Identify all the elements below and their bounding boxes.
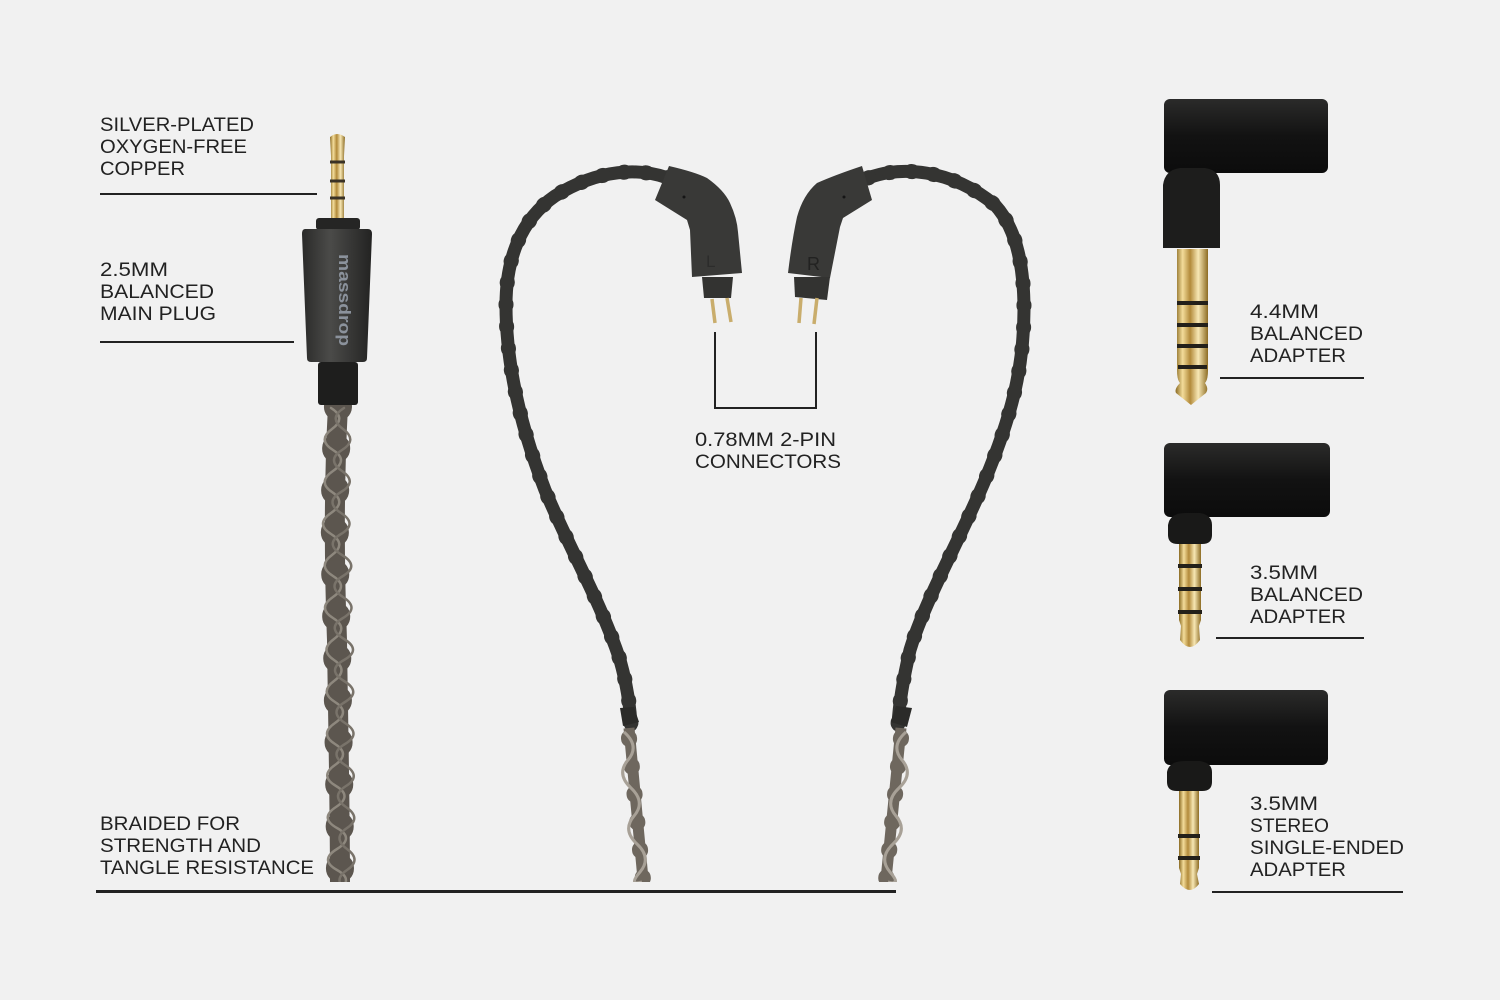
label: 2-pin connectors: CONNECTORS: [695, 452, 841, 473]
label: 3.5mm stereo adapter: ADAPTER: [1250, 860, 1346, 881]
main cable braid: [323, 406, 354, 891]
label: 2-pin connectors: [695, 430, 841, 473]
label: silver-plated copper: OXYGEN-FREE: [100, 137, 247, 158]
label: braided: TANGLE RESISTANCE: [100, 858, 314, 879]
label: silver-plated copper: SILVER-PLATED: [100, 115, 254, 136]
label: 3.5mm stereo adapter: 3.5MM: [1250, 794, 1318, 815]
label: braided: STRENGTH AND: [100, 836, 261, 857]
label: 3.5mm stereo adapter: STEREO: [1250, 816, 1329, 837]
left connector letter: L: [706, 252, 715, 271]
label: 3.5mm balanced adapter: [1250, 563, 1363, 628]
main 2.5mm plug: [302, 134, 372, 405]
label: main plug: MAIN PLUG: [100, 304, 216, 325]
label: braided: BRAIDED FOR: [100, 814, 240, 835]
label: 3.5mm stereo adapter: [1250, 794, 1404, 881]
label: 3.5mm balanced adapter: 3.5MM: [1250, 563, 1318, 584]
3.5mm balanced adapter: [1164, 443, 1330, 647]
label: 4.4mm adapter: ADAPTER: [1250, 346, 1346, 367]
leader lines: [96, 194, 1403, 892]
left L connector: [655, 166, 742, 323]
left twisted lower cable: [620, 707, 645, 890]
label: main plug: BALANCED: [100, 282, 214, 303]
label: 3.5mm balanced adapter: ADAPTER: [1250, 607, 1346, 628]
label: 3.5mm stereo adapter: SINGLE-ENDED: [1250, 838, 1404, 859]
label: 3.5mm balanced adapter: BALANCED: [1250, 585, 1363, 606]
label: braided: [100, 814, 314, 879]
label: main plug: 2.5MM: [100, 260, 168, 281]
4.4mm adapter: [1163, 99, 1328, 405]
label: 4.4mm adapter: BALANCED: [1250, 324, 1363, 345]
label: 4.4mm adapter: [1250, 302, 1363, 367]
label: main plug: [100, 260, 216, 325]
label: silver-plated copper: COPPER: [100, 159, 185, 180]
heart cable right: [868, 171, 1024, 725]
heart cable left: [506, 172, 668, 725]
plug brand text: massdrop: [335, 254, 353, 346]
right twisted lower cable: [885, 706, 912, 890]
3.5mm stereo adapter: [1164, 690, 1328, 890]
label: 2-pin connectors: 0.78MM 2-PIN: [695, 430, 836, 451]
label: 4.4mm adapter: 4.4MM: [1250, 302, 1319, 323]
right R connector: [788, 166, 872, 324]
label: silver-plated copper: [100, 115, 254, 180]
infographic canvas: [96, 99, 1403, 893]
right connector letter: R: [807, 254, 820, 274]
